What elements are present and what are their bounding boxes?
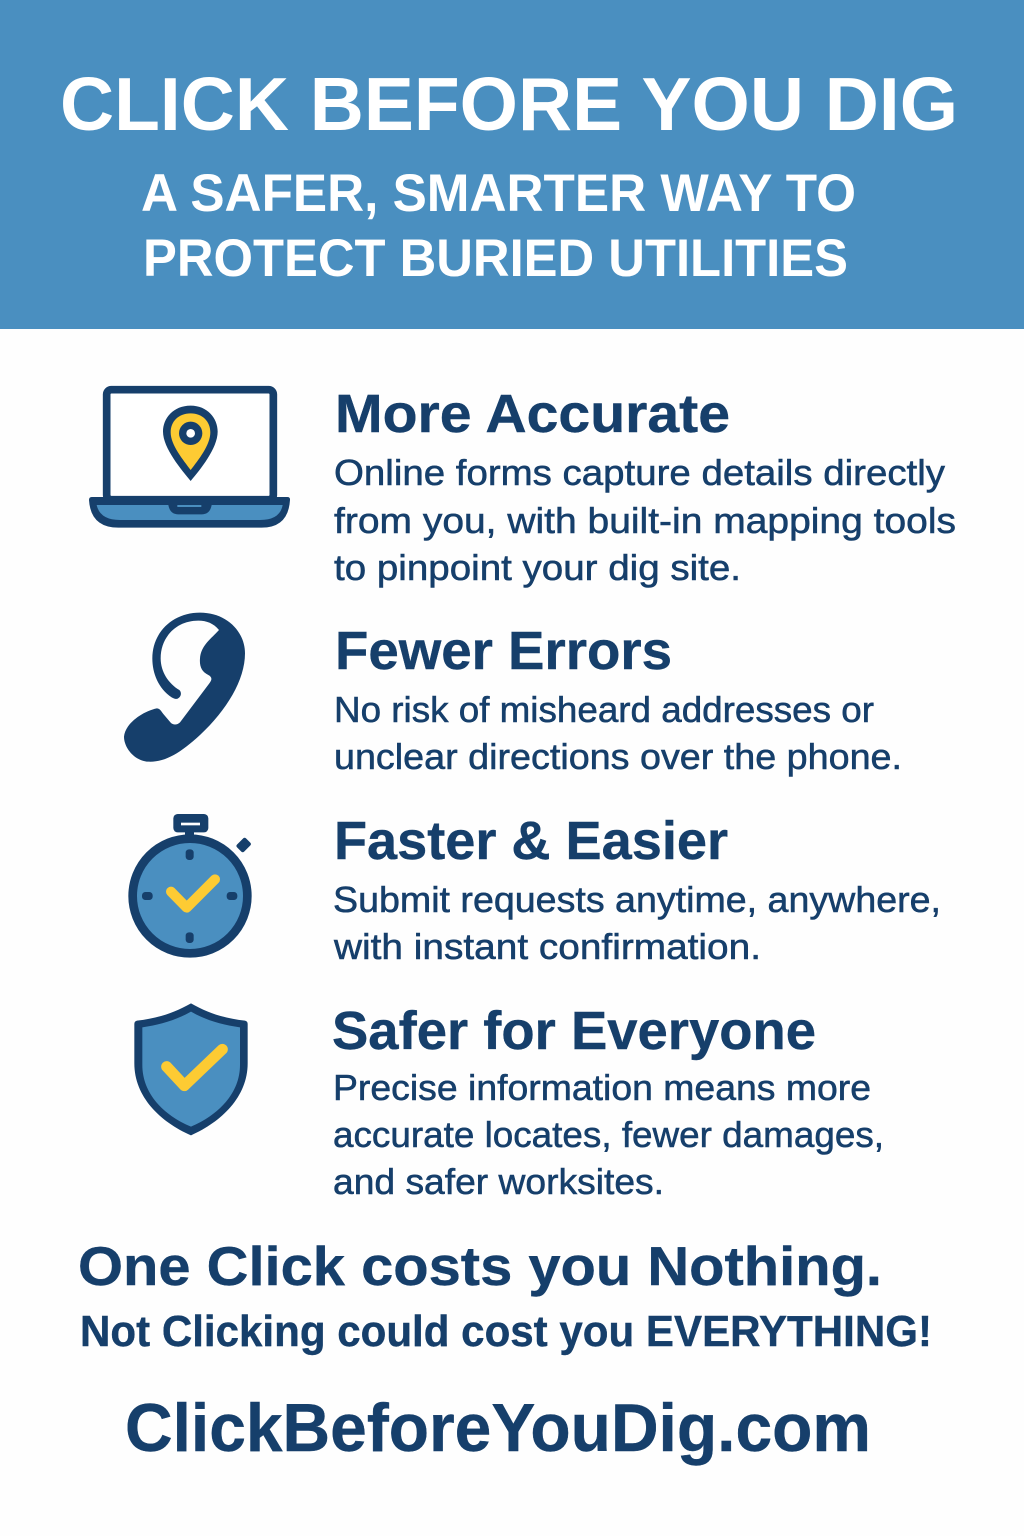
icon: telephone handset — [124, 613, 245, 762]
panel: safer for everyone text — [332, 1001, 884, 1202]
panel: fewer errors text: unclear directions over the phone. — [334, 736, 902, 777]
icon: laptop with location pin — [89, 390, 290, 528]
callout: closing message: Not Clicking could cost you EVERYTHING! — [80, 1307, 932, 1356]
panel: faster and easier text: Faster & Easier — [334, 811, 728, 871]
panel: more accurate text: to pinpoint your dig site. — [334, 547, 741, 588]
panel: fewer errors text — [334, 621, 902, 777]
header banner — [0, 0, 1024, 329]
panel: faster and easier text: Submit requests anytime, anywhere, — [333, 879, 941, 920]
icon: shield with check mark — [134, 1003, 248, 1135]
title: CLICK BEFORE YOU DIG — [60, 62, 958, 146]
callout: closing message — [78, 1235, 932, 1356]
panel: fewer errors text: Fewer Errors — [335, 621, 672, 681]
panel: safer for everyone text: Precise information means more — [333, 1067, 871, 1108]
icon: stopwatch with check mark — [133, 814, 252, 953]
subtitle: A SAFER, SMARTER WAY TO — [141, 164, 856, 223]
subtitle — [141, 164, 856, 288]
panel: safer for everyone text: Safer for Everyone — [332, 1001, 816, 1061]
callout: closing message: One Click costs you Nothing. — [78, 1235, 882, 1297]
panel: more accurate text: Online forms capture details directly — [334, 452, 945, 493]
panel: more accurate text: from you, with built-in mapping tools — [334, 500, 956, 541]
panel: faster and easier text: with instant confirmation. — [333, 926, 761, 967]
panel: fewer errors text: No risk of misheard addresses or — [334, 689, 874, 730]
website address: ClickBeforeYouDig.com — [125, 1390, 871, 1466]
panel: safer for everyone text: accurate locates, fewer damages, — [333, 1114, 884, 1155]
subtitle: PROTECT BURIED UTILITIES — [143, 229, 848, 288]
panel: more accurate text: More Accurate — [335, 384, 730, 444]
panel: more accurate text — [334, 384, 956, 588]
panel: faster and easier text — [333, 811, 941, 967]
panel: safer for everyone text: and safer worksites. — [333, 1161, 664, 1202]
